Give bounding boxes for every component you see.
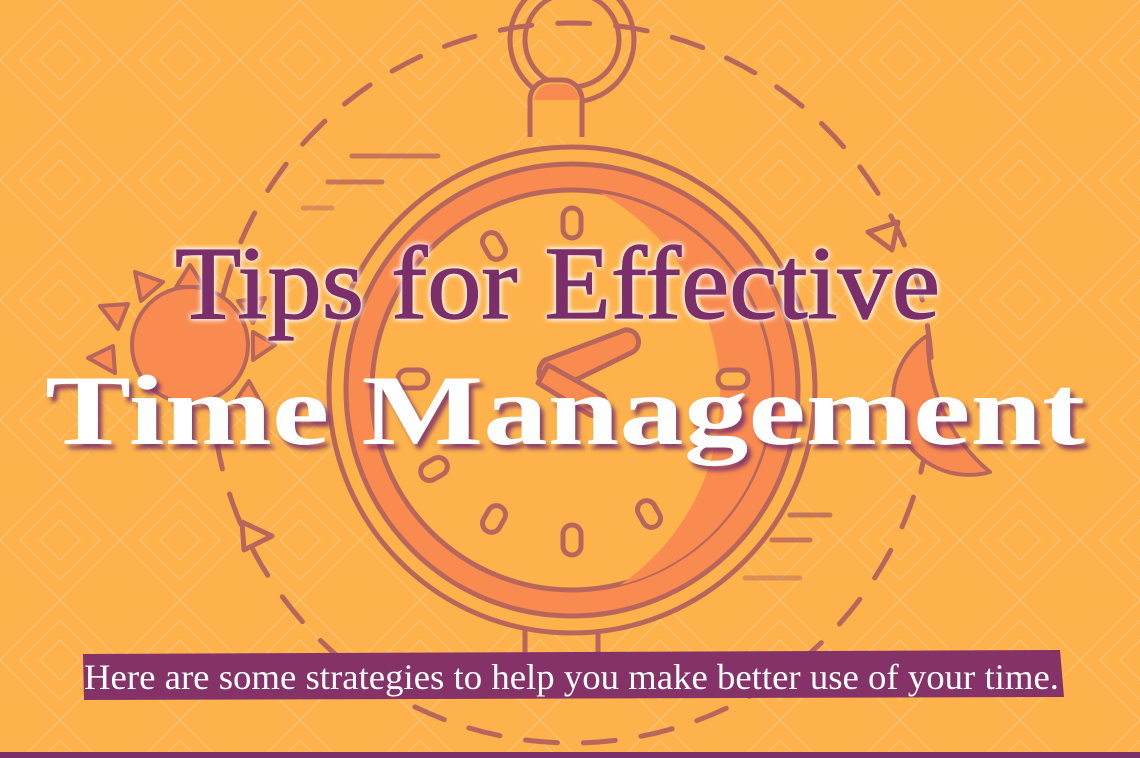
icon: sun bbox=[88, 265, 275, 405]
speed lines bbox=[303, 156, 830, 578]
dashed orbit circle bbox=[212, 23, 932, 743]
icon: stopwatch bbox=[329, 0, 815, 655]
icon: moon bbox=[893, 335, 990, 475]
subtitle banner: Here are some strategies to help you make better use of your time. bbox=[84, 657, 1059, 697]
title line 1: Tips for Effective bbox=[175, 226, 940, 341]
bottom strip bbox=[0, 752, 1140, 758]
title line 2: Time Management bbox=[45, 355, 1085, 466]
icon: triangles on orbit bbox=[242, 222, 898, 550]
